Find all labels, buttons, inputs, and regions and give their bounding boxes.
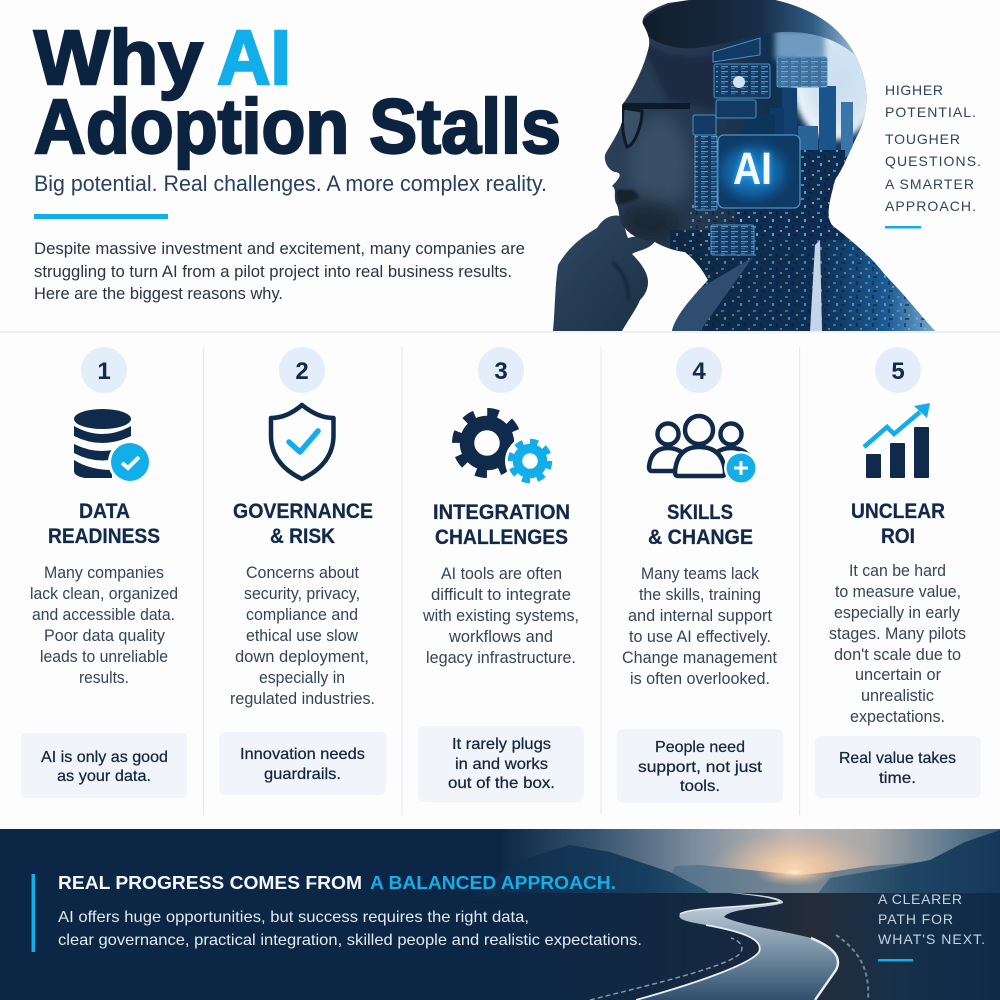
portrait: double exposure man with city xyxy=(553,0,940,335)
heading: ROI xyxy=(881,525,915,548)
glow text: AI xyxy=(733,143,772,194)
body text: AI tools are often xyxy=(441,565,562,583)
body text: legacy infrastructure. xyxy=(426,649,576,667)
title: Adoption Stalls xyxy=(34,84,561,170)
body text: Poor data quality xyxy=(44,627,166,645)
face shading xyxy=(616,40,730,244)
callout: People need xyxy=(655,739,745,756)
title: AI xyxy=(217,15,291,101)
footer text: clear governance, practical integration, skilled people and realistic expectations. xyxy=(58,932,642,949)
side tagline: QUESTIONS. xyxy=(885,153,981,169)
hand xyxy=(553,216,656,331)
number badge 5: 5 xyxy=(891,358,905,385)
body text: to use AI effectively. xyxy=(629,628,771,646)
body text: compliance and xyxy=(246,606,358,624)
heading: UNCLEAR xyxy=(851,500,945,523)
body text: the skills, training xyxy=(639,586,761,604)
body text: difficult to integrate xyxy=(431,586,571,604)
body text: and accessible data. xyxy=(32,606,175,624)
number badge 1 xyxy=(81,347,127,393)
icon: rising bar chart xyxy=(864,403,930,478)
number badge 4: 4 xyxy=(692,358,706,385)
side tagline: POTENTIAL. xyxy=(885,104,976,120)
torso xyxy=(670,230,940,335)
callout: guardrails. xyxy=(264,766,341,783)
body text: stages. Many pilots xyxy=(829,625,966,643)
accent rule xyxy=(34,214,168,219)
callout: Real value takes xyxy=(839,750,956,767)
panel: governance and risk xyxy=(219,347,386,795)
title xyxy=(34,15,561,170)
number badge 4 xyxy=(676,347,722,393)
number badge 3: 3 xyxy=(494,358,508,385)
callout: in and works xyxy=(455,756,548,773)
glasses xyxy=(621,106,690,147)
body text: don't scale due to xyxy=(834,646,961,664)
footer heading: A BALANCED APPROACH. xyxy=(370,872,616,893)
body text: lack clean, organized xyxy=(30,585,178,603)
section divider xyxy=(0,331,1000,333)
title: Why xyxy=(34,15,203,101)
side tagline: A SMARTER xyxy=(885,176,974,192)
heading: SKILLS xyxy=(667,501,733,524)
body text: uncertain or xyxy=(855,666,941,684)
side tagline: HIGHER xyxy=(885,82,943,98)
heading xyxy=(648,501,753,549)
callout: as your data. xyxy=(57,768,151,785)
heading: READINESS xyxy=(48,525,160,548)
body text: to measure value, xyxy=(835,583,961,601)
heading: & CHANGE xyxy=(648,526,753,549)
heading: CHALLENGES xyxy=(435,526,568,549)
body text: Change management xyxy=(622,649,777,667)
footer band xyxy=(0,829,1000,1000)
heading: DATA xyxy=(79,500,130,523)
footer heading: REAL PROGRESS COMES FROM xyxy=(58,872,362,893)
footer tagline: A CLEARER xyxy=(878,891,962,907)
icon: shield with check xyxy=(271,405,334,479)
heading xyxy=(433,501,570,549)
subtitle: Big potential. Real challenges. A more complex reality. xyxy=(34,171,547,196)
head and torso: AI xyxy=(733,143,772,194)
body text xyxy=(622,565,777,688)
heading xyxy=(233,500,373,548)
callout xyxy=(617,729,783,803)
icon: database with check xyxy=(74,409,152,484)
heading xyxy=(48,500,160,548)
panel: data readiness xyxy=(21,347,187,798)
footer heading xyxy=(58,872,616,893)
intro paragraph: Here are the biggest reasons why. xyxy=(34,284,283,303)
body text: leads to unreliable xyxy=(40,648,168,666)
intro paragraph: Despite massive investment and excitement, many companies are xyxy=(34,239,525,258)
body text: with existing systems, xyxy=(422,607,579,625)
accent bar xyxy=(32,874,35,952)
callout xyxy=(219,732,386,795)
body text: workflows and xyxy=(448,628,553,646)
body text: especially in early xyxy=(834,604,961,622)
body text: ethical use slow xyxy=(246,627,358,645)
body text: security, privacy, xyxy=(244,585,360,603)
callout: out of the box. xyxy=(448,775,555,792)
back of head light sky xyxy=(793,24,877,140)
body text: especially in xyxy=(259,669,345,687)
number badge 3 xyxy=(478,347,524,393)
number badge 1: 1 xyxy=(97,358,111,385)
number badge 2 xyxy=(279,347,325,393)
body text: results. xyxy=(79,669,129,687)
header section xyxy=(34,15,981,303)
icon: people with plus xyxy=(649,416,758,485)
side tagline: TOUGHER xyxy=(885,131,960,147)
body text: Concerns about xyxy=(246,564,359,582)
body text: is often overlooked. xyxy=(630,670,770,688)
data panels xyxy=(693,38,827,255)
body text: and internal support xyxy=(628,607,772,625)
panel: unclear ROI xyxy=(815,347,981,798)
heading xyxy=(851,500,945,548)
body text: regulated industries. xyxy=(230,690,375,708)
head and torso xyxy=(600,0,940,335)
heading: INTEGRATION xyxy=(433,501,570,524)
body text: down deployment, xyxy=(235,648,369,666)
intro paragraph xyxy=(34,239,525,303)
body text: unrealistic xyxy=(861,687,934,705)
number badge 5 xyxy=(875,347,921,393)
landscape: mountains and winding road xyxy=(470,829,1000,1000)
AI chip panel xyxy=(718,135,800,208)
footer text xyxy=(58,909,642,949)
intro paragraph: struggling to turn AI from a pilot project into real business results. xyxy=(34,262,512,281)
body text: Many companies xyxy=(44,564,164,582)
callout: AI is only as good xyxy=(41,749,168,766)
number badge 2: 2 xyxy=(295,358,309,385)
body text xyxy=(422,565,579,667)
skyline xyxy=(690,86,853,245)
footer tagline xyxy=(878,891,985,962)
body text: Many teams lack xyxy=(641,565,760,583)
callout xyxy=(21,733,187,798)
icon: gears xyxy=(457,413,555,486)
callout: time. xyxy=(879,770,916,787)
callout xyxy=(418,726,584,802)
hair xyxy=(640,0,856,56)
heading: GOVERNANCE xyxy=(233,500,373,523)
callout xyxy=(815,736,981,798)
body text: It can be hard xyxy=(849,562,946,580)
body text xyxy=(230,564,375,708)
footer tagline: PATH FOR xyxy=(878,911,953,927)
footer tagline: WHAT'S NEXT. xyxy=(878,931,985,947)
body text xyxy=(829,562,966,726)
callout: tools. xyxy=(680,778,720,795)
callout: Innovation needs xyxy=(240,746,365,763)
callout: support, not just xyxy=(638,759,763,776)
body text xyxy=(30,564,178,687)
footer text: AI offers huge opportunities, but success requires the right data, xyxy=(58,909,529,926)
column dividers xyxy=(203,347,800,815)
body text: expectations. xyxy=(850,708,945,726)
callout: It rarely plugs xyxy=(452,736,551,753)
heading: & RISK xyxy=(270,525,335,548)
side tagline xyxy=(885,82,981,228)
side tagline: APPROACH. xyxy=(885,198,976,214)
panel: integration challenges xyxy=(418,347,584,802)
panel: skills and change xyxy=(617,347,783,803)
